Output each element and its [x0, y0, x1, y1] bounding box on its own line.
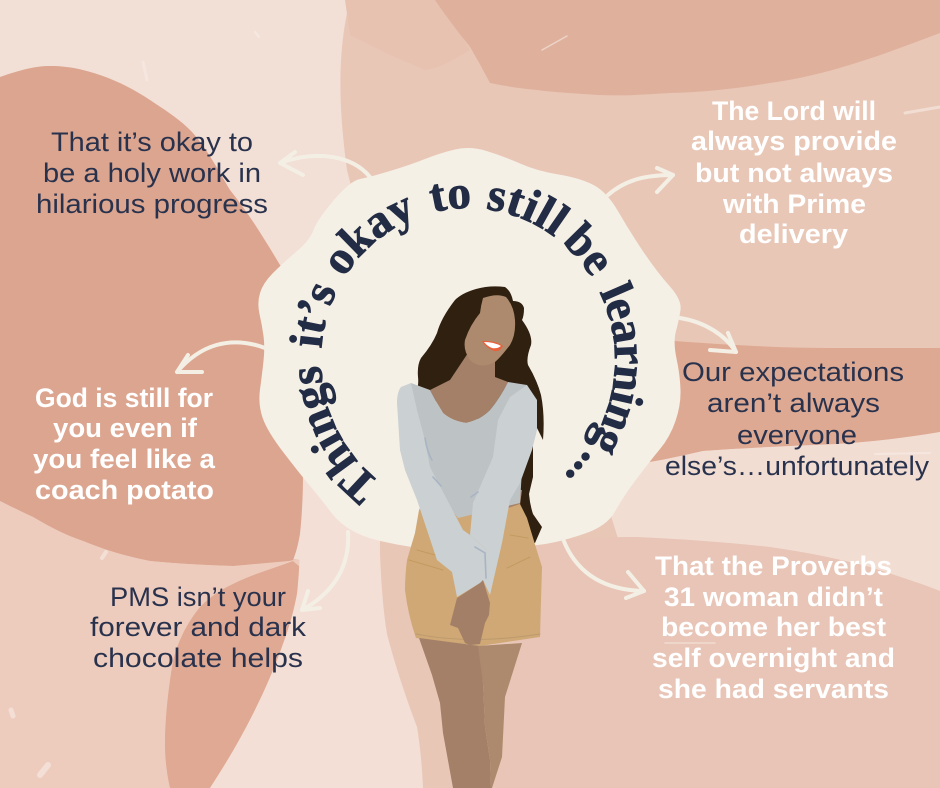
neck and chest: [430, 353, 508, 423]
arrow: top right: [608, 168, 673, 195]
text: Prime delivery: with Prime: [722, 189, 866, 219]
text: Proverbs 31 woman: self overnight and: [652, 643, 895, 673]
text: PMS: PMS isn’t your: [110, 582, 286, 612]
text: Proverbs 31 woman: 31 woman didn’t: [664, 582, 883, 612]
arrow: bottom left: [302, 532, 348, 610]
text: Proverbs 31 woman: [652, 551, 895, 704]
text: holy work in progress: [36, 127, 268, 219]
text: holy work in progress: That it’s okay to: [51, 127, 253, 157]
text: Prime delivery: [691, 96, 897, 249]
wavy cream badge: [258, 148, 681, 551]
right sleeve: [470, 385, 537, 595]
skirt creases: [409, 535, 540, 640]
text: PMS: chocolate helps: [93, 643, 303, 673]
skirt: [405, 490, 542, 646]
sweater folds: [425, 438, 486, 578]
text: holy work in progress: hilarious progress: [36, 189, 268, 219]
text: expectations: Our expectations: [682, 357, 904, 387]
hair: [416, 286, 544, 543]
woman illustration: [397, 286, 544, 788]
text: Proverbs 31 woman: she had servants: [658, 674, 889, 704]
face: [465, 295, 515, 366]
text: coach potato: coach potato: [35, 475, 214, 505]
text: PMS: [90, 582, 307, 673]
text: expectations: everyone: [737, 420, 857, 450]
curved title: Things it’s okay to still be learning...: [289, 184, 644, 506]
text: coach potato: you feel like a: [33, 444, 216, 474]
arrow: right: [680, 318, 736, 352]
arrow: bottom right: [563, 539, 644, 598]
right leg: [478, 643, 522, 788]
arrow: left: [177, 342, 265, 372]
text: expectations: [665, 357, 930, 481]
left leg: [419, 638, 491, 788]
text: coach potato: you even if: [53, 413, 198, 443]
text: expectations: aren’t always: [707, 388, 880, 418]
text: PMS: forever and dark: [90, 612, 307, 642]
text: Proverbs 31 woman: become her best: [661, 612, 886, 642]
text: coach potato: [33, 383, 216, 505]
belly strip: [500, 490, 522, 512]
text: Proverbs 31 woman: That the Proverbs: [655, 551, 892, 581]
text: Prime delivery: delivery: [739, 219, 848, 249]
text: Prime delivery: always provide: [691, 126, 897, 156]
text: Prime delivery: The Lord will: [712, 96, 876, 126]
arrow: top left: [280, 152, 370, 177]
text: expectations: else’s…unfortunately: [665, 451, 930, 481]
mouth: [482, 341, 503, 351]
text: Prime delivery: but not always: [695, 158, 893, 188]
hand: [450, 580, 490, 645]
text: holy work in progress: be a holy work in: [43, 158, 261, 188]
text: coach potato: God is still for: [35, 383, 213, 413]
sweater body: [411, 382, 527, 518]
left sleeve: [397, 383, 487, 597]
